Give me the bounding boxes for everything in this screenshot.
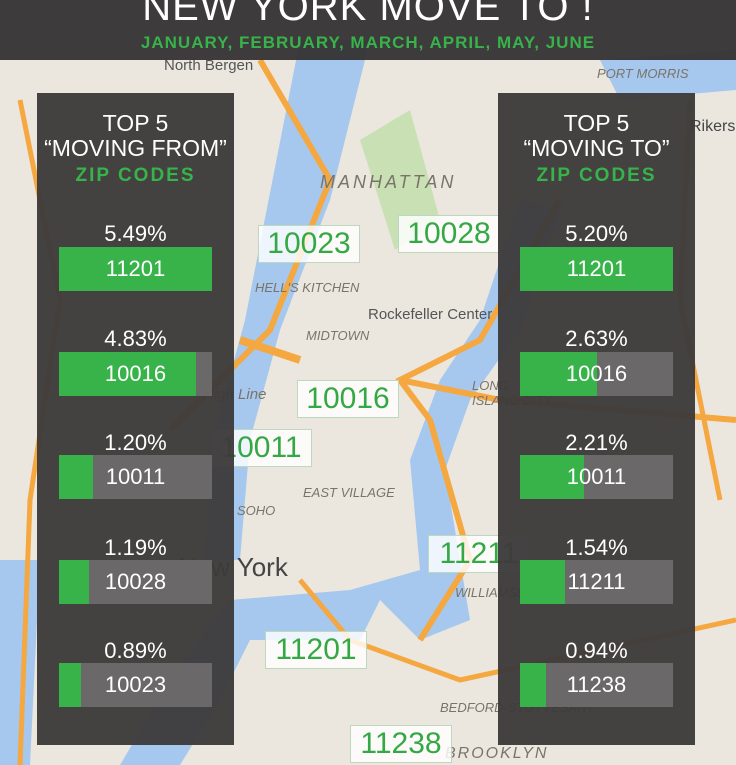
map labels: New York [178, 552, 288, 582]
panel heading: ZIP CODES [75, 165, 196, 186]
map labels: MIDTOWN [306, 328, 369, 343]
map zip label 11211 [428, 535, 530, 573]
bar 11211: 11211 [568, 569, 625, 594]
panel: moving to: 0.94% [565, 638, 628, 663]
panel: moving to: 2.21% [565, 430, 628, 455]
panel heading: ZIP CODES [536, 165, 657, 186]
map labels: MANHATTAN [320, 172, 456, 192]
subtitle: JANUARY, FEBRUARY, MARCH, APRIL, MAY, JUNE [141, 33, 595, 52]
panel: moving from: 4.83% [104, 326, 167, 351]
panel heading: “MOVING TO” [523, 135, 670, 161]
map zip label 11238 [350, 725, 452, 763]
bar 10023 [59, 663, 212, 707]
panel heading: TOP 5 [564, 110, 629, 136]
bar 11201 [520, 247, 673, 291]
panel heading: “MOVING FROM” [44, 135, 227, 161]
panel heading [44, 110, 227, 186]
panel: moving from [37, 93, 234, 745]
panel: moving to: 1.54% [565, 535, 628, 560]
map labels: BEDFORD-STUYVESANT [440, 700, 595, 715]
bar 10016 [59, 352, 212, 396]
map zip label 11211: 11211 [440, 537, 518, 570]
map labels: North Bergen [164, 57, 253, 74]
header band [0, 0, 736, 60]
bar 10011: 10011 [567, 464, 626, 489]
bar 10016: 10016 [105, 361, 166, 386]
panel: moving to: 5.20% [565, 221, 628, 246]
panel: moving from: 0.89% [104, 638, 167, 663]
bar 10028 [59, 560, 212, 604]
panel heading [523, 110, 670, 186]
panel: moving from: 1.20% [104, 430, 167, 455]
map zip label 11238: 11238 [360, 727, 442, 760]
map labels: PORT MORRIS [597, 66, 688, 81]
bar 11238: 11238 [567, 672, 626, 697]
map labels: Rockefeller Center [368, 306, 492, 323]
map labels: Rikers [690, 118, 735, 135]
panel: moving from: 5.49% [104, 221, 167, 246]
map labels: ISLAND CITY [472, 393, 552, 408]
map labels: EAST VILLAGE [303, 485, 395, 500]
bar 10011 [520, 455, 673, 499]
bar 10016 [520, 352, 673, 396]
bar 10011: 10011 [106, 464, 165, 489]
map zip label 10028: 10028 [407, 217, 491, 250]
bar 10016: 10016 [566, 361, 627, 386]
map labels: High Line [203, 386, 266, 403]
map zip label 10011 [210, 429, 312, 467]
map labels: HELL'S KITCHEN [255, 280, 359, 295]
bar 10011 [59, 455, 212, 499]
map labels: BROOKLYN [445, 745, 548, 762]
bar 11201 [59, 247, 212, 291]
map labels: LONG [472, 378, 509, 393]
panel heading: TOP 5 [103, 110, 168, 136]
map zip label 11201: 11201 [275, 633, 357, 666]
panel: moving to [498, 93, 695, 745]
bar 11238 [520, 663, 673, 707]
bar 11201: 11201 [106, 256, 165, 281]
panel: moving to: 2.63% [565, 326, 628, 351]
map labels: WILLIAMSBURG [455, 585, 555, 600]
map zip label 10016: 10016 [306, 382, 390, 415]
bar 11211 [520, 560, 673, 604]
map zip label 10011: 10011 [220, 431, 302, 464]
map labels: SOHO [237, 503, 275, 518]
bar 10023: 10023 [105, 672, 166, 697]
bar 11201: 11201 [567, 256, 626, 281]
bar 10028: 10028 [105, 569, 166, 594]
map zip label 10023: 10023 [267, 227, 351, 260]
panel: moving from: 1.19% [104, 535, 167, 560]
map zip label 11201 [265, 631, 367, 669]
